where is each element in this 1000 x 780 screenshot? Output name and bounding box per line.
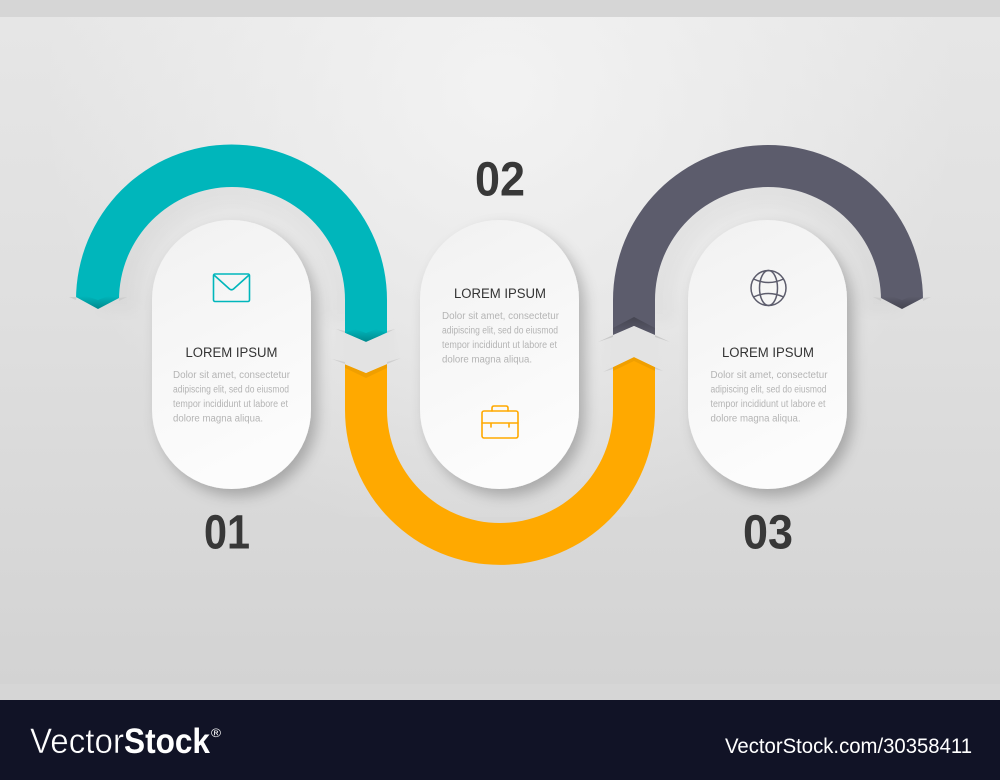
body text — [173, 370, 291, 424]
soft shade under the arcs — [119, 187, 881, 320]
body text: adipiscing elit, sed do eiusmod — [442, 326, 558, 336]
footer bar — [0, 700, 1000, 780]
dark right tip shadow — [881, 296, 923, 309]
body text: Dolor sit amet, consectetur — [173, 370, 291, 381]
arc: teal — [76, 144, 387, 342]
number 02: 02 — [475, 154, 525, 206]
body text: dolore magna aliqua. — [710, 414, 800, 424]
body text — [710, 370, 828, 424]
body text — [442, 311, 560, 366]
footer logo — [30, 722, 221, 761]
teal left tip shadow — [76, 296, 119, 309]
dark left notch shadow — [613, 317, 655, 335]
body text: Dolor sit amet, consectetur — [710, 370, 828, 381]
icon: globe — [751, 270, 786, 306]
number 01: 01 — [204, 506, 250, 560]
panel: card 02 — [420, 220, 579, 489]
icon: envelope — [214, 274, 250, 302]
body text: dolore magna aliqua. — [173, 414, 263, 424]
orange left notch shadow — [345, 364, 387, 378]
footer id: VectorStock.com/30358411 — [725, 735, 972, 758]
panel: card 01 — [152, 220, 311, 489]
fold flap: orange to dark — [598, 326, 670, 372]
number 03: 03 — [743, 506, 793, 560]
body text: Dolor sit amet, consectetur — [442, 311, 560, 322]
body text: dolore magna aliqua. — [442, 354, 532, 366]
body text: tempor incididunt ut labore et — [442, 340, 557, 351]
arc: dark grey — [613, 145, 923, 335]
orange right notch shadow — [613, 357, 655, 371]
footer logo: ® — [211, 726, 221, 740]
body text: adipiscing elit, sed do eiusmod — [173, 384, 289, 396]
footer logo: Vector — [30, 722, 124, 761]
end flap: teal left — [69, 297, 127, 301]
panel: card 03 — [688, 220, 847, 489]
heading: LOREM IPSUM — [722, 345, 814, 360]
teal right tip shadow — [345, 329, 387, 342]
fold flap: teal to orange — [332, 329, 401, 373]
heading: LOREM IPSUM — [454, 286, 546, 301]
body text: adipiscing elit, sed do eiusmod — [710, 384, 826, 396]
arc: orange — [345, 357, 655, 565]
body text: tempor incididunt ut labore et — [710, 399, 826, 410]
end flap: dark right — [873, 297, 931, 301]
heading: LOREM IPSUM — [186, 345, 278, 360]
footer logo: Stock — [124, 722, 210, 761]
body text: tempor incididunt ut labore et — [173, 399, 288, 410]
icon: briefcase — [482, 406, 518, 438]
